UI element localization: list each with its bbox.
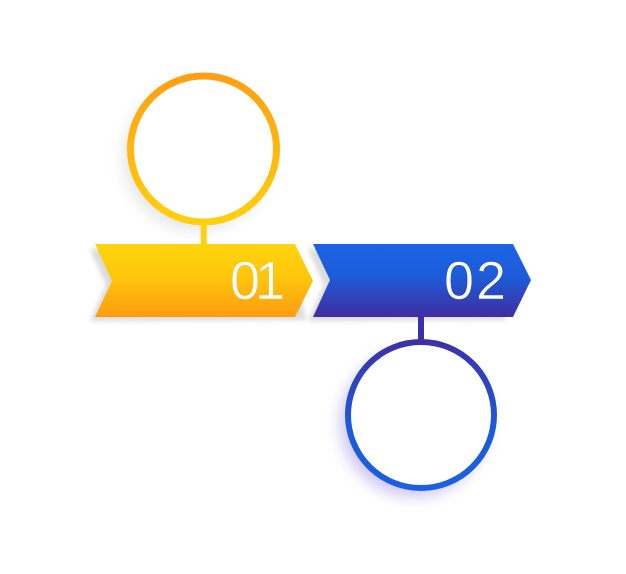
number: 01: 1	[255, 251, 285, 311]
connector: step 1	[201, 222, 207, 245]
arrow: step 1	[95, 244, 313, 317]
shadow: step 1 circle	[123, 83, 271, 231]
circle: step 1	[130, 76, 276, 222]
arrow: step 2	[313, 244, 531, 317]
shadow: step 2 arrow	[308, 249, 508, 321]
circle: step 2	[348, 342, 494, 488]
number: 02: 2	[476, 251, 506, 311]
connector: step 2	[418, 316, 424, 342]
shadow: step 1 arrow	[90, 249, 306, 321]
number: 02: 0	[444, 251, 474, 311]
shadow: step 2 circle	[340, 349, 488, 497]
number: 01: 0	[230, 251, 260, 311]
